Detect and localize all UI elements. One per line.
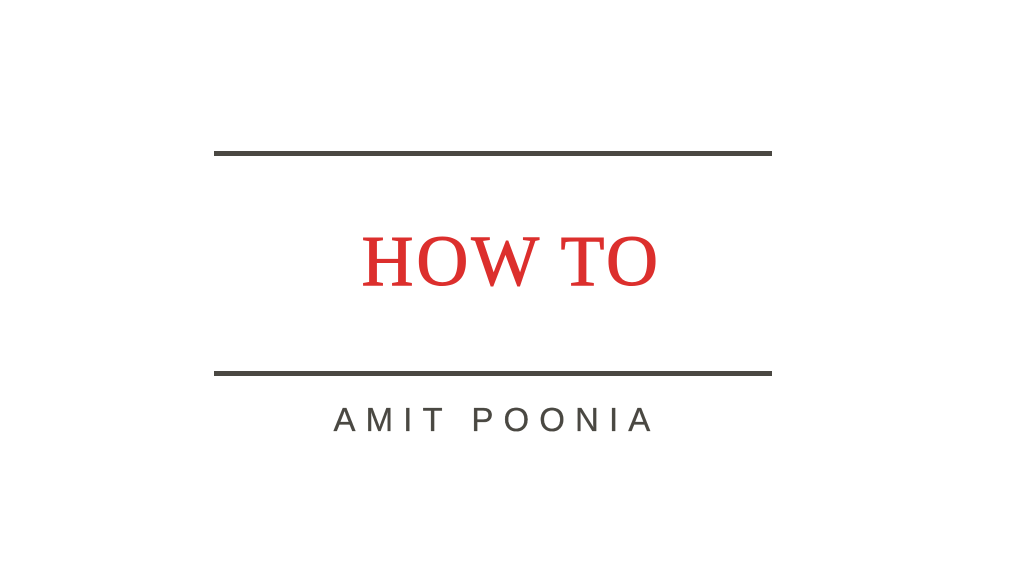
top divider: [214, 151, 772, 156]
author name: AMIT POONIA: [334, 401, 660, 438]
title: HOW TO: [362, 221, 661, 301]
bottom divider: [214, 371, 772, 376]
